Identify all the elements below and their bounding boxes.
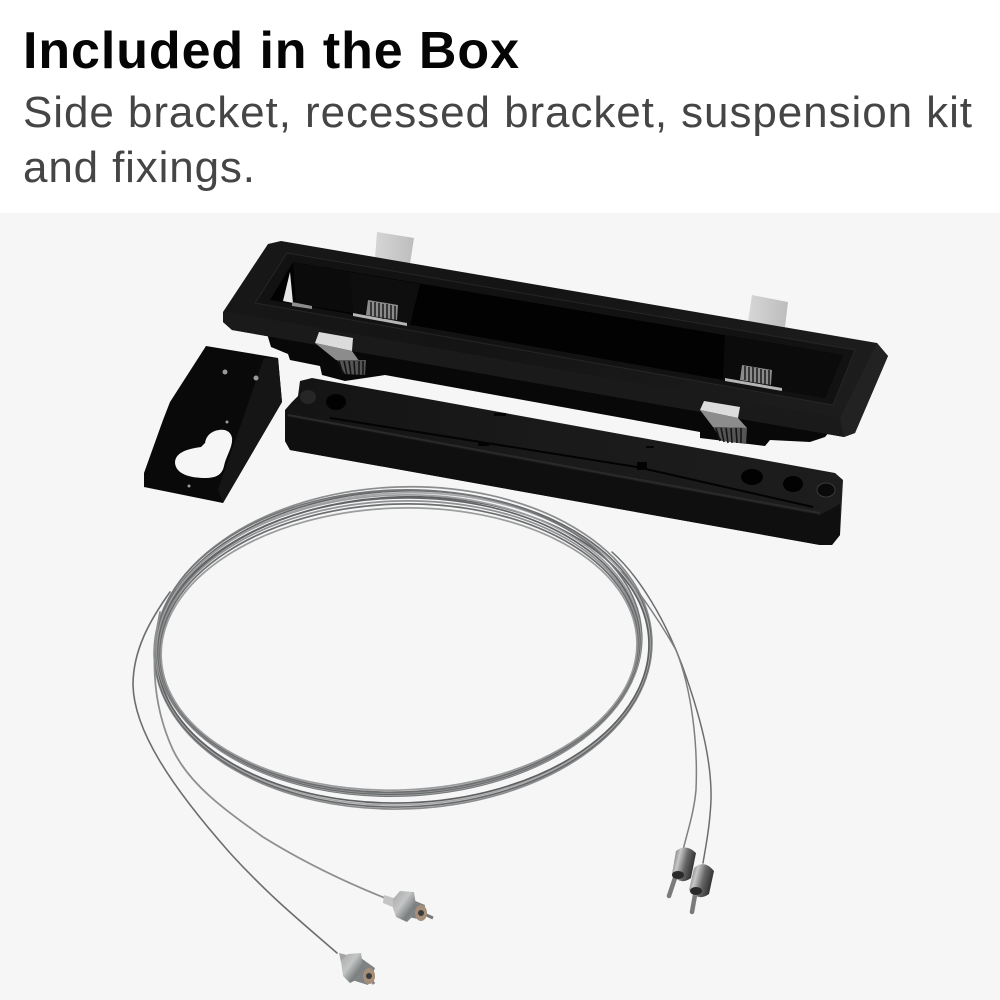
ferrule xyxy=(339,953,347,964)
bar holes left xyxy=(300,390,346,410)
bracket frame xyxy=(223,241,888,437)
inner spring right xyxy=(725,365,782,391)
recessed bracket xyxy=(223,232,888,446)
pin xyxy=(370,978,374,984)
sleeve xyxy=(672,847,696,881)
cylinder ferrule left xyxy=(669,847,696,896)
wire coil xyxy=(133,478,711,953)
bar centre slot xyxy=(330,418,813,507)
front clip right xyxy=(700,401,747,444)
bar small notches xyxy=(478,413,654,470)
description line 2: and fixings. xyxy=(23,143,255,192)
brass end xyxy=(363,968,375,984)
inner spring left xyxy=(353,300,407,326)
threaded body xyxy=(352,956,375,985)
bar edge highlight xyxy=(288,415,820,513)
opening light gap xyxy=(283,272,293,303)
sleeve end xyxy=(672,871,684,879)
frame inner recess line xyxy=(255,253,855,405)
brass end xyxy=(415,905,427,921)
rear clip right xyxy=(748,295,788,327)
pin xyxy=(669,878,675,896)
long wire to lower nut xyxy=(133,592,337,953)
front clip left xyxy=(315,332,366,375)
bar front face xyxy=(285,417,840,545)
side bracket outer wall xyxy=(218,358,282,503)
bar holes right xyxy=(741,469,835,497)
ferrule xyxy=(383,895,397,908)
heading block xyxy=(23,22,972,192)
side bracket xyxy=(144,346,282,503)
pin xyxy=(692,895,695,912)
bore xyxy=(366,973,372,979)
inner loop strands xyxy=(151,482,647,804)
long wire to upper nut xyxy=(154,612,385,898)
bracket opening xyxy=(270,262,843,398)
title: Included in the Box xyxy=(23,22,519,80)
side bracket body with keyhole xyxy=(144,346,282,503)
bracket lower body xyxy=(268,330,835,446)
long wire to right cylinder xyxy=(612,552,711,863)
hex nut xyxy=(393,891,416,922)
coil strands xyxy=(149,478,657,817)
sleeve end xyxy=(690,887,702,895)
frame lower bevel xyxy=(223,312,844,437)
side bracket mounting holes xyxy=(188,370,258,488)
bar body xyxy=(285,378,843,545)
rear clip left xyxy=(375,232,414,264)
threaded nut upper xyxy=(383,891,433,922)
sleeve xyxy=(689,864,714,897)
bore xyxy=(418,910,424,916)
suspension mount bar xyxy=(285,378,843,545)
threaded nut lower xyxy=(339,953,375,985)
outer loop strands xyxy=(149,478,657,817)
cylinder ferrule right xyxy=(689,864,714,912)
description line 1: Side bracket, recessed bracket, suspension kit xyxy=(23,88,972,137)
long wire to left cylinder xyxy=(622,572,696,850)
threaded body xyxy=(408,898,425,920)
photo background panel xyxy=(0,213,1000,1000)
pin xyxy=(422,913,433,918)
hex nut xyxy=(341,953,363,983)
